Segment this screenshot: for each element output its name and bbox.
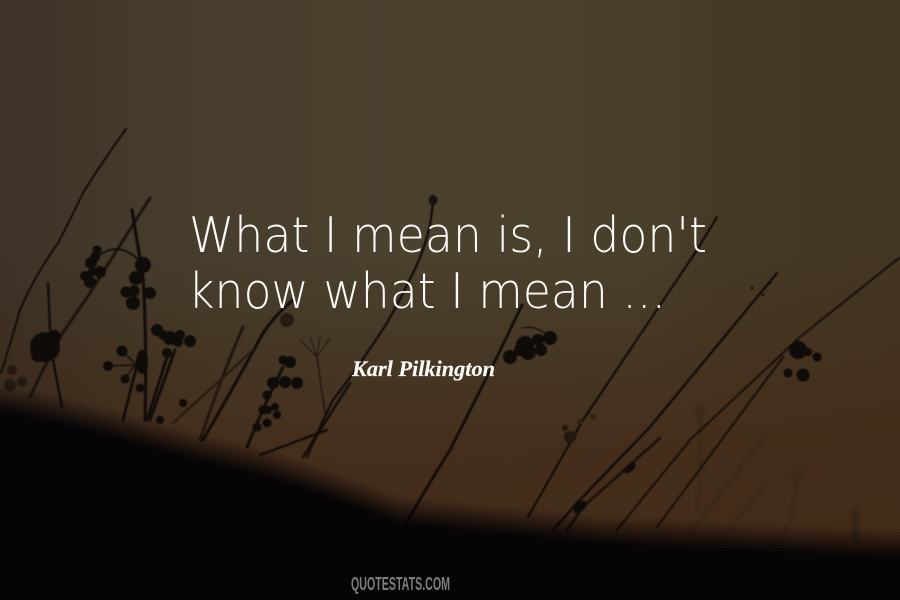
dark hillside foreground	[0, 385, 900, 600]
faint background stems	[690, 404, 855, 547]
silhouette: left grasses and seed heads	[1, 129, 350, 457]
quote text: What I mean is, I don't	[189, 207, 707, 264]
footer: site credit: QUOTESTATS.COM	[351, 574, 450, 594]
quote text: know what I mean ...	[188, 263, 666, 320]
silhouette: centre and right grasses	[307, 195, 899, 530]
attribution: author name: Karl Pilkington	[351, 356, 495, 381]
quote text	[188, 207, 707, 320]
